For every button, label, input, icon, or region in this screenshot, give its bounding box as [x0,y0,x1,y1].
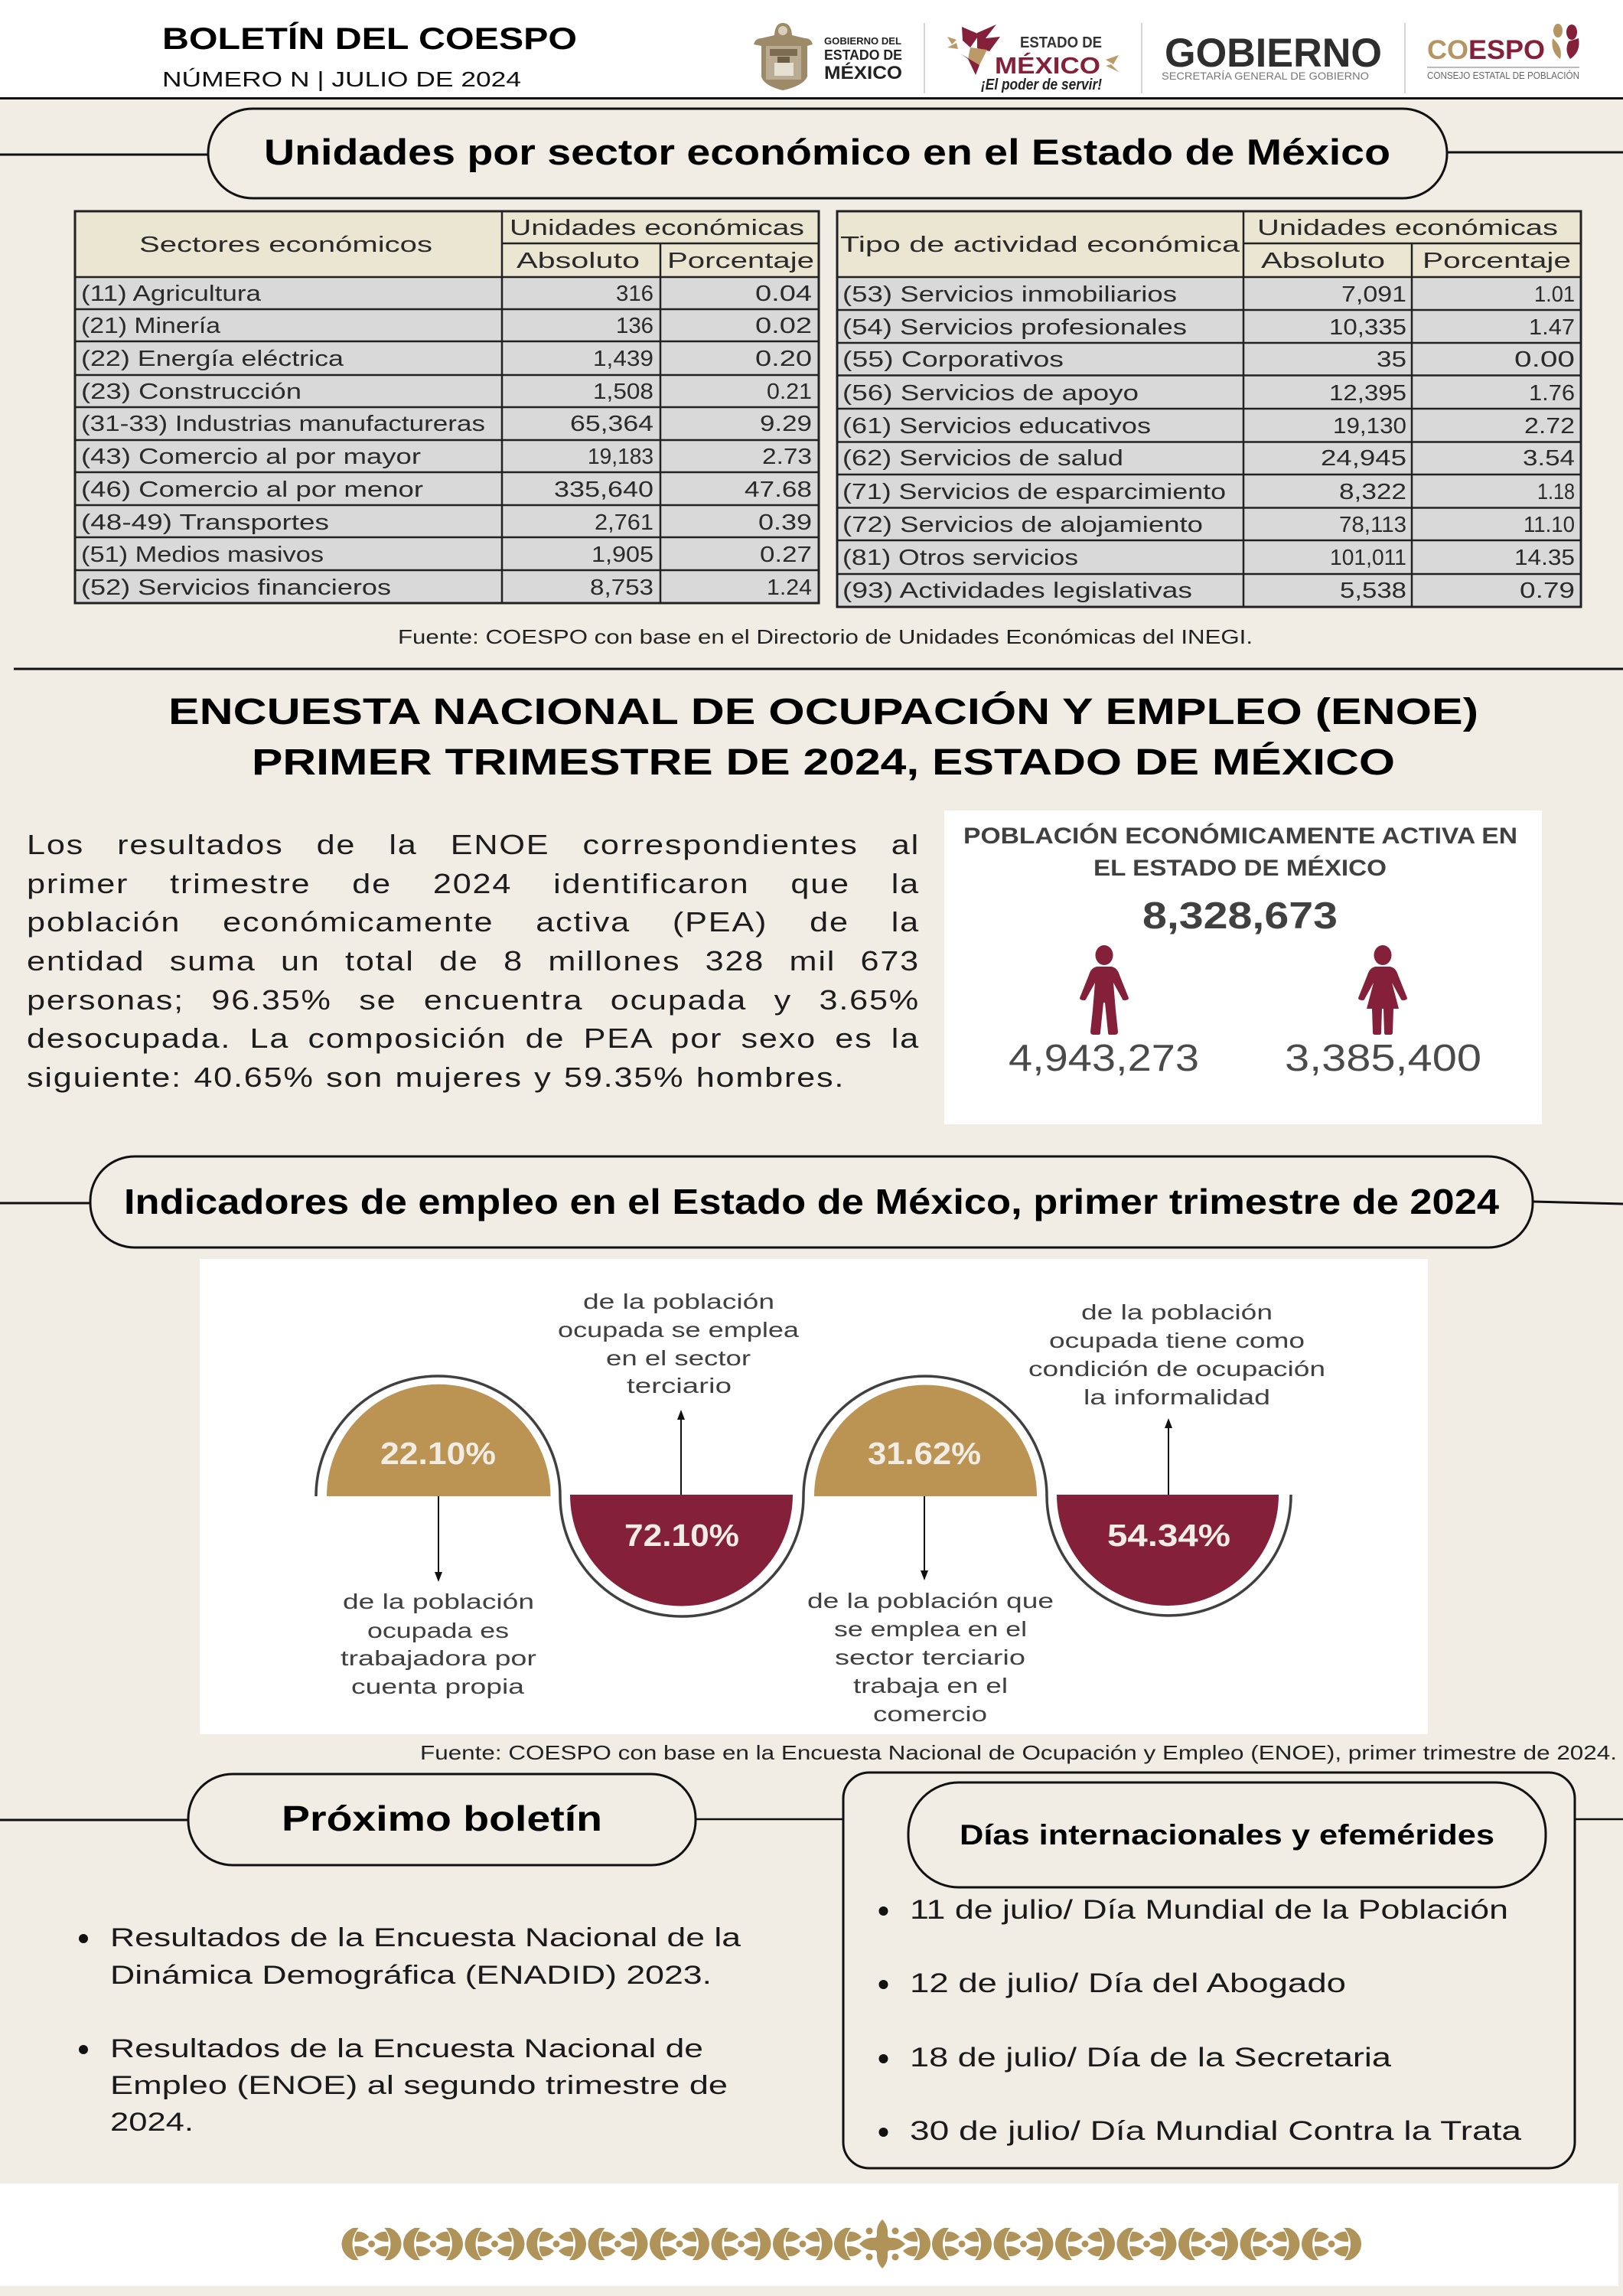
arrow: up from 54.34% [1165,1418,1172,1495]
row: (52) Servicios financieros [81,576,812,600]
row: (53) Servicios inmobiliarios: 1.01 [1534,282,1575,307]
table header: actividad: Tipo de actividad económica [840,233,1240,257]
item: ENOE [79,2034,728,2137]
caption: comercio: se emplea en el [834,1617,1027,1641]
row: (46) Comercio al por menor: 47.68 [745,478,812,502]
icon: man [1080,945,1129,1035]
row: (71) Servicios de esparcimiento [842,480,1575,504]
header band [0,0,1623,99]
caption: informalidad: la informalidad [1084,1385,1270,1409]
row: (54) Servicios profesionales [842,315,1575,340]
total PEA figure: 8,328,673 [1142,895,1338,937]
logo: Gobierno, Secretaría General de Gobierno: GOBIERNO [1165,31,1382,76]
caption: cuenta propia: ocupada es [367,1619,509,1642]
row: (93) Actividades legislativas: 5,538 [1340,579,1406,603]
male count: 4,943,273 [1009,1038,1199,1079]
panel: indicadores chart [200,1259,1428,1734]
row: (46) Comercio al por menor: (46) Comercio al por menor [81,478,423,502]
row: (31-33) Industrias manufactureras [81,412,812,436]
gauge: 72.10% [570,1495,793,1606]
gauge: 72.10%: 72.10% [624,1518,739,1553]
paragraph: resultados ENOE: Los resultados de la ENOE correspondientes al [27,829,920,860]
logo text: Gobierno del Estado de México: MÉXICO [824,62,902,83]
section heading: Unidades por sector económico: Unidades por sector económico en el Estado de México [264,132,1390,172]
caption: cuenta propia [341,1590,536,1698]
caption: cuenta propia: de la población [343,1590,534,1613]
row: (81) Otros servicios [842,546,1575,570]
panel heading: días internacionales [908,1782,1546,1887]
table header: sectores: Unidades económicas [510,216,804,240]
row: (46) Comercio al por menor: 335,640 [554,478,653,502]
header title: BOLETÍN DEL COESPO [162,21,577,56]
row: (71) Servicios de esparcimiento: (71) Servicios de esparcimiento [842,480,1226,504]
logo: COESPO [1427,24,1579,81]
panel heading: días internacionales: Días internacionales y efemérides [960,1819,1494,1851]
gauge: 31.62%: 31.62% [868,1436,981,1471]
item: ENOE: Empleo (ENOE) al segundo trimestre de [110,2071,728,2100]
row: (21) Minería: (21) Minería [81,314,221,338]
paragraph: resultados ENOE: entidad suma un total de 8 millones 328 mil 673 [27,945,920,977]
row: (52) Servicios financieros: 1.24 [767,576,812,600]
item: ENOE: Resultados de la Encuesta Nacional de [110,2034,703,2063]
section heading: Próximo boletín [0,1774,843,1865]
row: (51) Medios masivos: 0.27 [760,543,812,567]
row: (71) Servicios de esparcimiento: 1.18 [1537,480,1575,504]
paragraph: resultados ENOE: siguiente: 40.65% son mujeres y 59.35% hombres. [27,1062,845,1093]
caption: comercio: de la población que [807,1589,1054,1613]
row: (23) Construcción [81,380,812,404]
paragraph: resultados ENOE: personas; 96.35% se encuentra ocupada y 3.65% [27,984,920,1016]
gauge: 54.34%: 54.34% [1107,1518,1230,1553]
row: (43) Comercio al por mayor [81,445,812,469]
row: (62) Servicios de salud [842,446,1575,471]
row: (43) Comercio al por mayor: 19,183 [588,445,653,469]
row: (72) Servicios de alojamiento [842,513,1575,537]
table header: sectores [75,211,819,277]
row: (52) Servicios financieros: 8,753 [590,576,653,600]
row: (61) Servicios educativos [842,414,1575,439]
row: (72) Servicios de alojamiento: 78,113 [1339,513,1406,537]
caption: sector terciario: terciario [627,1374,732,1397]
logo: Gobierno, Secretaría General de Gobierno: SECRETARÍA GENERAL DE GOBIERNO [1162,70,1369,82]
paragraph: resultados ENOE: desocupada. La composición de PEA por sexo es la [27,1022,920,1054]
item: ENADID: Dinámica Demográfica (ENADID) 2023. [110,1961,712,1990]
caption: informalidad: de la población [1081,1300,1273,1324]
row: (53) Servicios inmobiliarios [842,282,1575,307]
row: (48-49) Transportes: (48-49) Transportes [81,510,329,535]
row: (51) Medios masivos: 1,905 [592,543,653,567]
caption: cuenta propia: cuenta propia [351,1675,525,1698]
gauge: 22.10%: 22.10% [380,1436,496,1471]
row: (21) Minería: 136 [616,314,653,338]
row: (55) Corporativos: (55) Corporativos [842,347,1064,372]
logo text: Gobierno del Estado de México [824,35,902,83]
logo text: Estado de México: ESTADO DE [1020,34,1102,51]
row: (61) Servicios educativos: 19,130 [1333,414,1406,439]
section heading: Unidades por sector económico [0,109,1623,198]
logo: COESPO: CO [1427,35,1468,65]
table header: sectores: Absoluto [517,249,640,273]
row: (81) Otros servicios: 14.35 [1514,546,1575,570]
caption: comercio: comercio [873,1702,987,1726]
row: (93) Actividades legislativas: (93) Actividades legislativas [842,579,1192,603]
caption: sector terciario [558,1290,800,1397]
row: (43) Comercio al por mayor: 2.73 [762,445,812,469]
logo: COESPO: CONSEJO ESTATAL DE POBLACIÓN [1427,70,1579,81]
section heading: Próximo boletín: Próximo boletín [282,1799,602,1838]
caption: sector terciario: en el sector [606,1346,751,1370]
row: (22) Energía eléctrica: (22) Energía eléctrica [81,347,344,371]
section title: ENOE [168,690,1478,783]
row: (56) Servicios de apoyo: 1.76 [1529,381,1575,406]
panel heading: PEA: POBLACIÓN ECONÓMICAMENTE ACTIVA EN [963,823,1517,849]
row: (11) Agricultura: 0.04 [755,282,812,306]
panel heading: PEA: EL ESTADO DE MÉXICO [1093,855,1387,881]
row: (54) Servicios profesionales: (54) Servicios profesionales [842,315,1187,340]
row: (56) Servicios de apoyo: 12,395 [1329,381,1406,406]
caption: sector terciario: ocupada se emplea [558,1318,800,1342]
table: sectores económicos [75,211,819,603]
caption: informalidad: ocupada tiene como [1049,1329,1305,1352]
row: (93) Actividades legislativas [842,579,1575,603]
row: (22) Energía eléctrica: 1,439 [593,347,653,371]
item: 30 de julio: 30 de julio/ Día Mundial Contra la Trata [910,2116,1522,2146]
caption: comercio [807,1589,1054,1726]
table header: actividad [837,211,1581,277]
gauge: 31.62% [814,1385,1037,1496]
row: (48-49) Transportes: 2,761 [595,510,653,535]
arrow: down from 22.10% [435,1496,442,1582]
row: (55) Corporativos: 35 [1377,347,1406,372]
row: (62) Servicios de salud: 24,945 [1321,446,1406,471]
row: (21) Minería: 0.02 [755,314,812,338]
row: (23) Construcción: 0.21 [767,380,812,404]
logo text: Estado de México [981,34,1102,93]
row: (93) Actividades legislativas: 0.79 [1520,579,1575,603]
row: (55) Corporativos [842,347,1575,372]
table header: sectores: Sectores económicos [139,233,432,257]
arrow: up from 72.10% [677,1410,685,1495]
table header: actividad: Unidades económicas [1257,216,1558,240]
paragraph: resultados ENOE [27,829,920,1093]
logo: Gobierno del Estado de México shield [754,23,813,90]
table header: sectores: Porcentaje [667,249,814,273]
caption: comercio: sector terciario [835,1645,1025,1669]
row: (81) Otros servicios: (81) Otros servicios [842,546,1078,570]
row: (43) Comercio al por mayor: (43) Comercio al por mayor [81,445,421,469]
row: (22) Energía eléctrica [81,347,812,371]
table: tipo de actividad económica [837,211,1581,607]
panel: días internacionales [843,1773,1623,2168]
panel heading: PEA [963,823,1517,881]
row: (53) Servicios inmobiliarios: (53) Servicios inmobiliarios [842,282,1177,307]
table header: actividad: Porcentaje [1423,249,1571,273]
caption: informalidad [1028,1300,1325,1409]
row: (61) Servicios educativos: 2.72 [1524,414,1575,439]
row: (51) Medios masivos [81,543,812,567]
caption: comercio: trabaja en el [853,1674,1008,1698]
item: ENADID: Resultados de la Encuesta Nacional de la [110,1923,741,1952]
row: (48-49) Transportes: 0.39 [758,510,812,535]
row: (23) Construcción: 1,508 [593,380,653,404]
logo text: Gobierno del Estado de México: ESTADO DE [824,47,902,63]
panel: población económicamente activa [944,810,1542,1124]
row: (31-33) Industrias manufactureras: (31-33) Industrias manufactureras [81,412,485,436]
row: (81) Otros servicios: 101,011 [1330,546,1406,570]
paragraph: resultados ENOE: población económicamente activa (PEA) de la [27,906,920,938]
row: (31-33) Industrias manufactureras: 9.29 [760,412,812,436]
list: próximo boletín [79,1923,741,2137]
row: (23) Construcción: (23) Construcción [81,380,301,404]
gauge: 54.34% [1057,1495,1279,1606]
icon: woman [1358,945,1407,1035]
row: (54) Servicios profesionales: 1.47 [1529,315,1575,340]
row: (52) Servicios financieros: (52) Servicios financieros [81,576,391,600]
arrow: down from 31.62% [921,1496,928,1580]
logo text: Gobierno del Estado de México: GOBIERNO DEL [824,35,901,47]
item: 12 de julio: 12 de julio/ Día del Abogado [910,1968,1346,1998]
row: (21) Minería [81,314,812,338]
row: (56) Servicios de apoyo: (56) Servicios de apoyo [842,381,1139,406]
row: (51) Medios masivos: (51) Medios masivos [81,543,324,567]
row: (55) Corporativos: 0.00 [1514,347,1575,372]
logo: Estado de México bird [947,24,1119,75]
row: (46) Comercio al por menor [81,478,812,502]
female count: 3,385,400 [1285,1038,1481,1079]
logo: COESPO: ESPO [1468,35,1545,65]
item: ENOE: 2024. [110,2108,194,2137]
caption: cuenta propia: trabajadora por [341,1646,536,1670]
paragraph: resultados ENOE: primer trimestre de 2024 identificaron que la [27,868,920,899]
section heading: Indicadores de empleo [0,1156,1623,1247]
header issue line: NÚMERO N | JULIO DE 2024 [162,67,521,91]
item: 11 de julio: 11 de julio/ Día Mundial de la Población [910,1895,1508,1925]
caption: informalidad: condición de ocupación [1028,1357,1325,1381]
section heading: Indicadores de empleo: Indicadores de empleo en el Estado de México, primer trimestre de 2024 [124,1182,1499,1221]
footer band [0,2183,1618,2286]
row: (11) Agricultura [81,282,812,306]
caption: sector terciario: de la población [583,1290,774,1313]
table header: actividad: Absoluto [1261,249,1385,273]
row: (11) Agricultura: (11) Agricultura [81,282,262,306]
source note: tables: Fuente: COESPO con base en el Directorio de Unidades Económicas del INEGI. [398,625,1253,648]
row: (54) Servicios profesionales: 10,335 [1329,315,1406,340]
wave outline [316,1376,1291,1616]
row: (48-49) Transportes [81,510,812,535]
ornament: footer frieze [341,2219,1361,2268]
item: 18 de julio: 18 de julio/ Día de la Secretaria [910,2043,1392,2073]
row: (62) Servicios de salud: (62) Servicios de salud [842,446,1123,471]
row: (53) Servicios inmobiliarios: 7,091 [1341,282,1406,307]
section title: ENOE: PRIMER TRIMESTRE DE 2024, ESTADO DE MÉXICO [252,742,1395,783]
row: (56) Servicios de apoyo [842,381,1575,406]
row: (61) Servicios educativos: (61) Servicios educativos [842,414,1151,439]
row: (72) Servicios de alojamiento: (72) Servicios de alojamiento [842,513,1203,537]
logo text: Estado de México: ¡El poder de servir! [981,77,1102,93]
row: (11) Agricultura: 316 [616,282,653,306]
gauge: 22.10% [327,1384,551,1496]
item: ENADID [79,1923,741,1990]
logo text: Estado de México: MÉXICO [995,52,1100,79]
row: (22) Energía eléctrica: 0.20 [755,347,812,371]
row: (62) Servicios de salud: 3.54 [1523,446,1575,471]
row: (72) Servicios de alojamiento: 11.10 [1524,513,1575,537]
row: (31-33) Industrias manufactureras: 65,364 [570,412,653,436]
row: (71) Servicios de esparcimiento: 8,322 [1339,480,1406,504]
section title: ENOE: ENCUESTA NACIONAL DE OCUPACIÓN Y EMPLEO (ENOE) [168,690,1478,732]
source note: ENOE: Fuente: COESPO con base en la Encuesta Nacional de Ocupación y Empleo (ENOE), primer trimestre de 2024. [420,1741,1617,1764]
